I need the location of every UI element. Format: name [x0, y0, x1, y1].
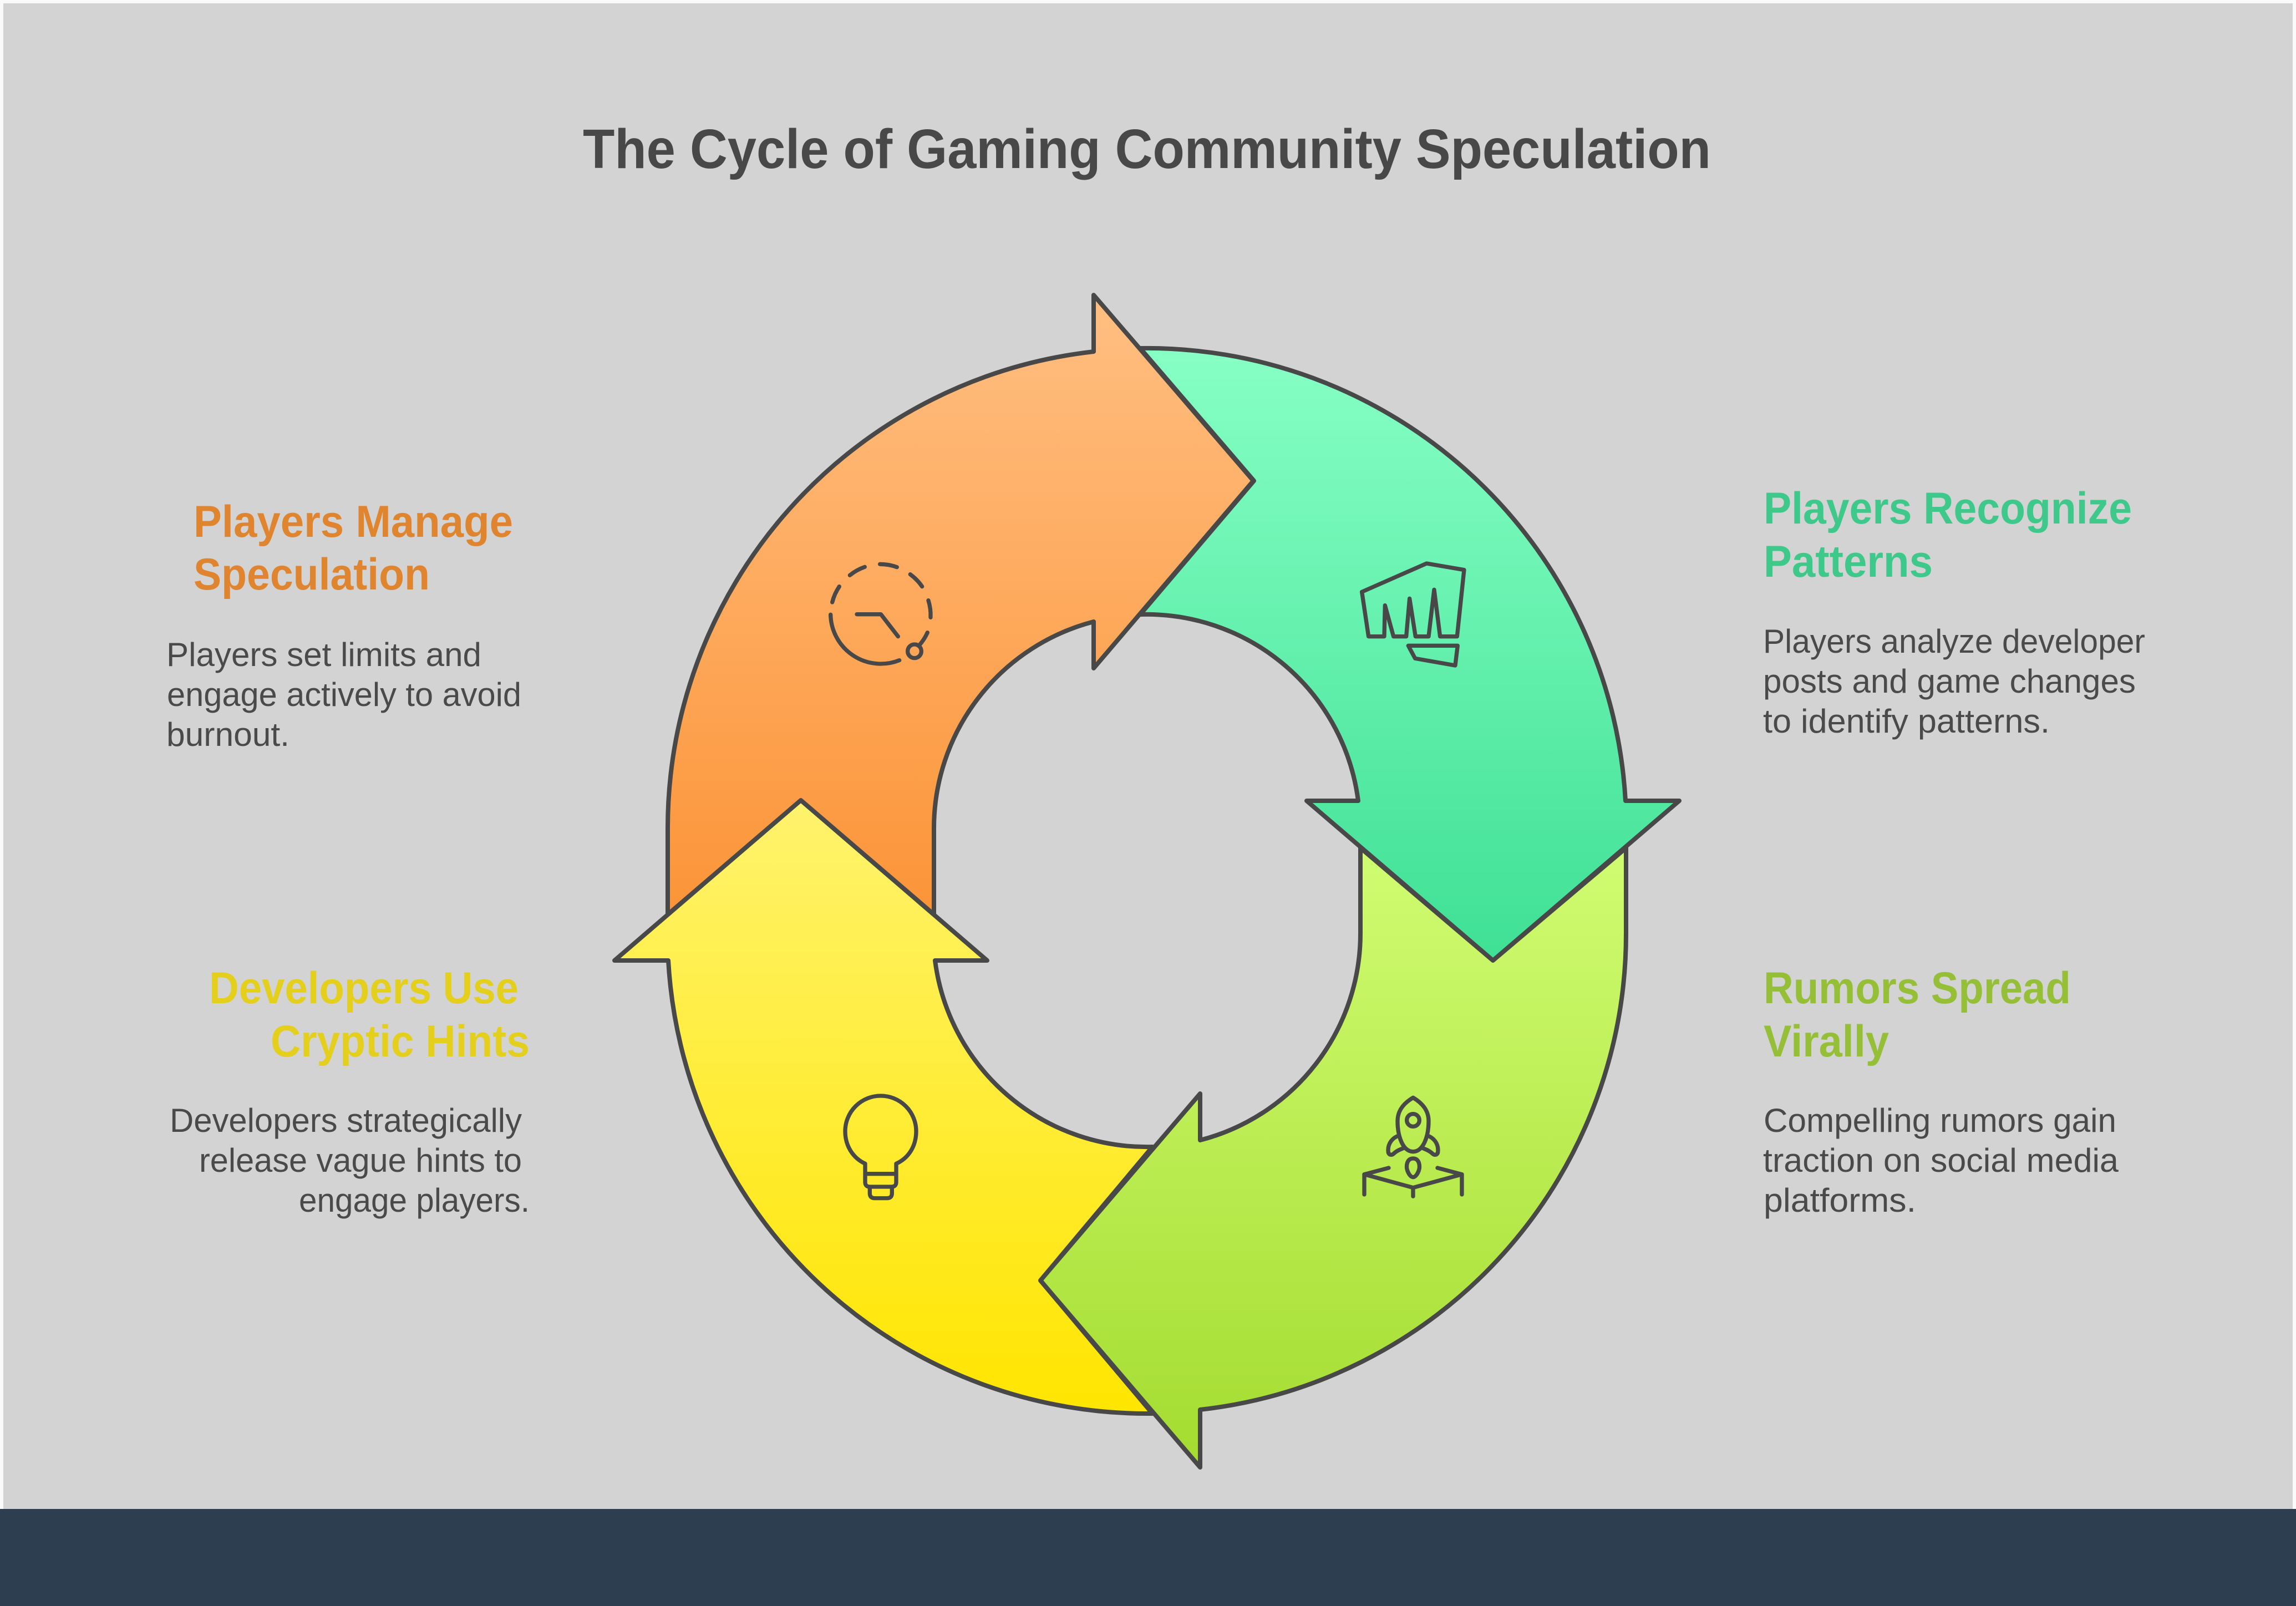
- text block: rumors spread virally: Virally: [1764, 1017, 1889, 1066]
- text block: rumors spread virally: traction on social media: [1763, 1142, 2119, 1179]
- text block: players manage speculation: burnout.: [166, 716, 289, 753]
- text block: players manage speculation: Speculation: [194, 550, 430, 599]
- text block: developers use cryptic hints: [170, 963, 530, 1219]
- text block: rumors spread virally: [1763, 963, 2119, 1219]
- arrow: rumors spread virally (lime): [1040, 848, 1626, 1467]
- text block: players manage speculation: Players Manage: [194, 497, 513, 547]
- text block: players recognize patterns: to identify patterns.: [1763, 703, 2050, 740]
- title: The Cycle of Gaming Community Speculation: [583, 118, 1711, 180]
- arrow: players recognize patterns (green): [1140, 348, 1679, 960]
- icon: light bulb: [845, 1096, 916, 1198]
- text block: rumors spread virally: Rumors Spread: [1764, 963, 2071, 1013]
- text block: players recognize patterns: Players Recognize: [1764, 484, 2132, 533]
- text block: players recognize patterns: [1763, 484, 2145, 740]
- text block: players recognize patterns: Players analyze developer: [1763, 623, 2145, 660]
- text block: developers use cryptic hints: release vague hints to: [199, 1142, 522, 1179]
- text block: developers use cryptic hints: Developers strategically: [170, 1102, 522, 1139]
- text block: developers use cryptic hints: Developers Use: [209, 963, 519, 1013]
- text block: developers use cryptic hints: Cryptic Hints: [271, 1017, 530, 1066]
- icon: dashed clock: [831, 564, 931, 664]
- text block: players manage speculation: engage actively to avoid: [167, 676, 521, 713]
- text block: players manage speculation: [166, 497, 521, 753]
- text block: players recognize patterns: posts and game changes: [1763, 663, 2136, 700]
- cycle diagram: [614, 295, 1679, 1467]
- icon: fist: [1362, 563, 1464, 665]
- text block: developers use cryptic hints: engage players.: [299, 1182, 530, 1219]
- footer bar: [0, 1509, 2296, 1606]
- icon: rocket launching from platform: [1364, 1097, 1462, 1196]
- text block: rumors spread virally: platforms.: [1764, 1182, 1916, 1219]
- text block: players manage speculation: Players set limits and: [166, 636, 481, 673]
- arrow: developers use cryptic hints (yellow): [614, 800, 1152, 1414]
- arrow: players manage speculation (orange): [668, 295, 1253, 914]
- text block: players recognize patterns: Patterns: [1764, 537, 1933, 587]
- text block: rumors spread virally: Compelling rumors gain: [1764, 1102, 2116, 1139]
